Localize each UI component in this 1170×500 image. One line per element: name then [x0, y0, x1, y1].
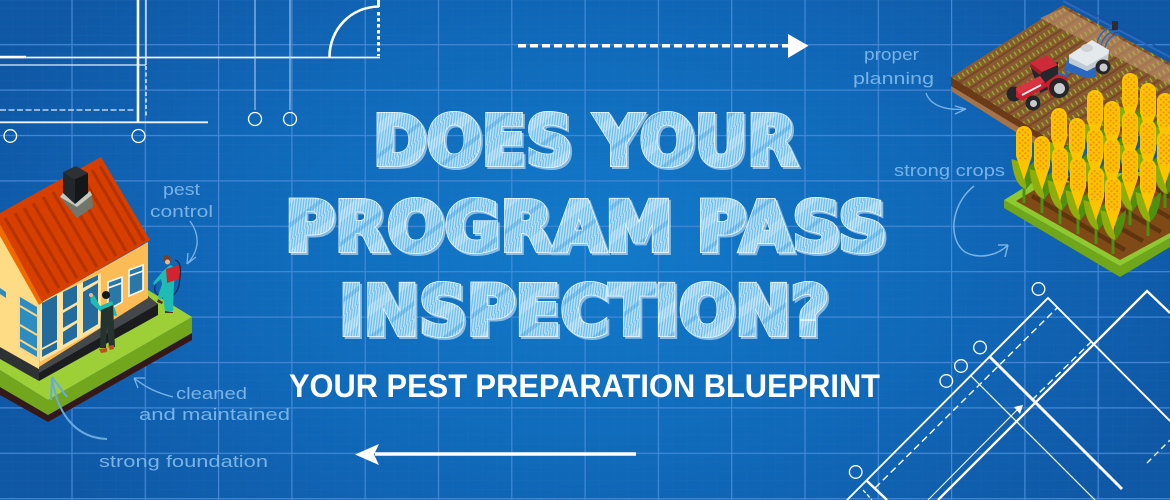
- label: proper planning: [853, 45, 934, 88]
- title: [285, 102, 889, 354]
- title line 2: PROGRAM PASS: [287, 190, 889, 270]
- label: pest control: pest: [163, 180, 200, 199]
- label: pest control: control: [150, 202, 213, 221]
- house walls: [0, 232, 148, 369]
- title line 2: PROGRAM PASS: [285, 188, 887, 268]
- subtitle: YOUR PEST PREPARATION BLUEPRINT: [289, 368, 880, 404]
- label: strong foundation: strong foundation: [99, 452, 268, 471]
- foundation: [0, 296, 158, 381]
- arrow: strong crops: [954, 186, 1008, 257]
- front windows and door: [40, 265, 143, 362]
- arrow: cleaned and maintained: [134, 378, 173, 397]
- illustration: house on green plot: [0, 157, 192, 422]
- dashed arrow pointing right: [518, 34, 808, 58]
- label: cleaned and maintained: cleaned: [176, 384, 247, 403]
- title line 1: DOES YOUR: [373, 102, 797, 182]
- door swing symbol: [330, 0, 379, 57]
- label: strong crops: strong crops: [894, 161, 1005, 180]
- tractor: [1006, 55, 1069, 110]
- field soil: [951, 5, 1170, 160]
- chimney: [60, 166, 93, 218]
- title line 3: INSPECTION?: [341, 274, 831, 354]
- label: cleaned and maintained: [139, 384, 290, 424]
- illustration: planted field with tractor: [951, 0, 1170, 160]
- pest control worker: [153, 255, 180, 313]
- corn rows: [1012, 73, 1170, 254]
- illustration: corn plot: [1004, 73, 1170, 277]
- label: cleaned and maintained: and maintained: [139, 405, 290, 424]
- plot base: [1004, 158, 1170, 277]
- title line 1: DOES YOUR: [373, 102, 797, 182]
- plot base: [0, 290, 192, 422]
- title line 1: DOES YOUR: [375, 104, 799, 184]
- solid arrow pointing left: [355, 444, 636, 465]
- title line 3: INSPECTION?: [339, 272, 829, 352]
- arrow: pest control: [187, 221, 197, 264]
- spray haze: [1040, 8, 1170, 85]
- label: proper planning: proper: [864, 45, 919, 64]
- arrow: proper planning: [926, 93, 966, 114]
- title line 3: INSPECTION?: [339, 272, 829, 352]
- roof: [0, 157, 150, 305]
- spray tank: [1064, 40, 1110, 78]
- floor plan bottom right: [847, 283, 1170, 500]
- floor plan top left: [0, 0, 380, 142]
- man cleaning window: [89, 291, 117, 353]
- label: proper planning: planning: [853, 69, 934, 88]
- sprayer mast: [1112, 21, 1118, 30]
- arrow: strong foundation: [51, 377, 107, 439]
- label: pest control: [150, 180, 213, 221]
- left wall windows: [0, 288, 38, 360]
- title line 2: PROGRAM PASS: [285, 188, 887, 268]
- sprayer boom: [1063, 0, 1170, 57]
